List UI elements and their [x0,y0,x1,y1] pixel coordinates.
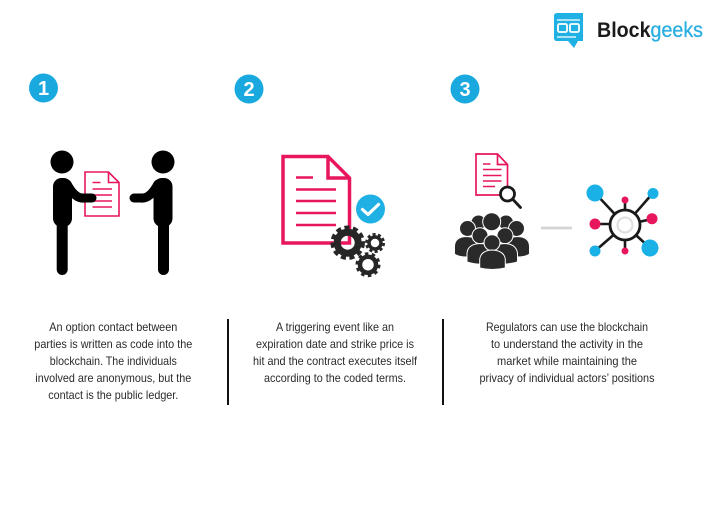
text block: step 3: privacy of individual actors’ positions [480,371,655,385]
text block: step 3: Regulators can use the blockchain [486,320,648,334]
icon: check badge [356,194,385,224]
text block: step 1: parties is written as code into the [34,337,193,351]
illustration: network hub [586,184,658,256]
illustration: two people exchanging contract [50,150,174,275]
step badge 3 [450,74,480,104]
text block: step 1 [34,320,193,402]
text block: step 2: A triggering event like an [276,320,394,334]
illustration: contract with check and gears [283,156,385,276]
text block: step 3: to understand the activity in the [491,337,643,351]
icon: contract document [283,156,350,243]
divider 1 [227,319,229,405]
step badge 1 [29,74,58,102]
person right [134,150,174,275]
icon: gears [333,228,384,276]
icon: contract document [85,172,119,216]
step badge 2 [234,74,264,104]
person left [50,150,92,275]
icon: magnifier [500,187,520,208]
step badge 3: 3 [459,79,471,101]
icon: crowd of people [454,213,530,270]
text block: step 1: An option contact between [49,320,177,334]
wordmark: Blockgeeks [597,19,703,42]
icon: speech bubble glasses [554,13,583,48]
text block: step 1: contact is the public ledger. [48,388,178,402]
text block: step 2: according to the coded terms. [264,371,406,385]
text block: step 1: involved are anonymous, but the [35,371,192,385]
text block: step 1: blockchain. The individuals [50,354,177,368]
divider 2 [442,319,444,405]
text block: step 2 [253,320,418,385]
logo: Blockgeeks [554,13,703,48]
text block: step 3 [480,320,655,385]
text block: step 2: hit and the contract executes itself [253,354,418,368]
step badge 1: 1 [38,78,49,100]
illustration: regulators reviewing contract [454,154,530,270]
icon: contract document [476,154,508,195]
connector dash [541,227,572,229]
text block: step 2: expiration date and strike price is [256,337,414,351]
text block: step 3: market while maintaining the [497,354,637,368]
step badge 2: 2 [243,79,255,101]
